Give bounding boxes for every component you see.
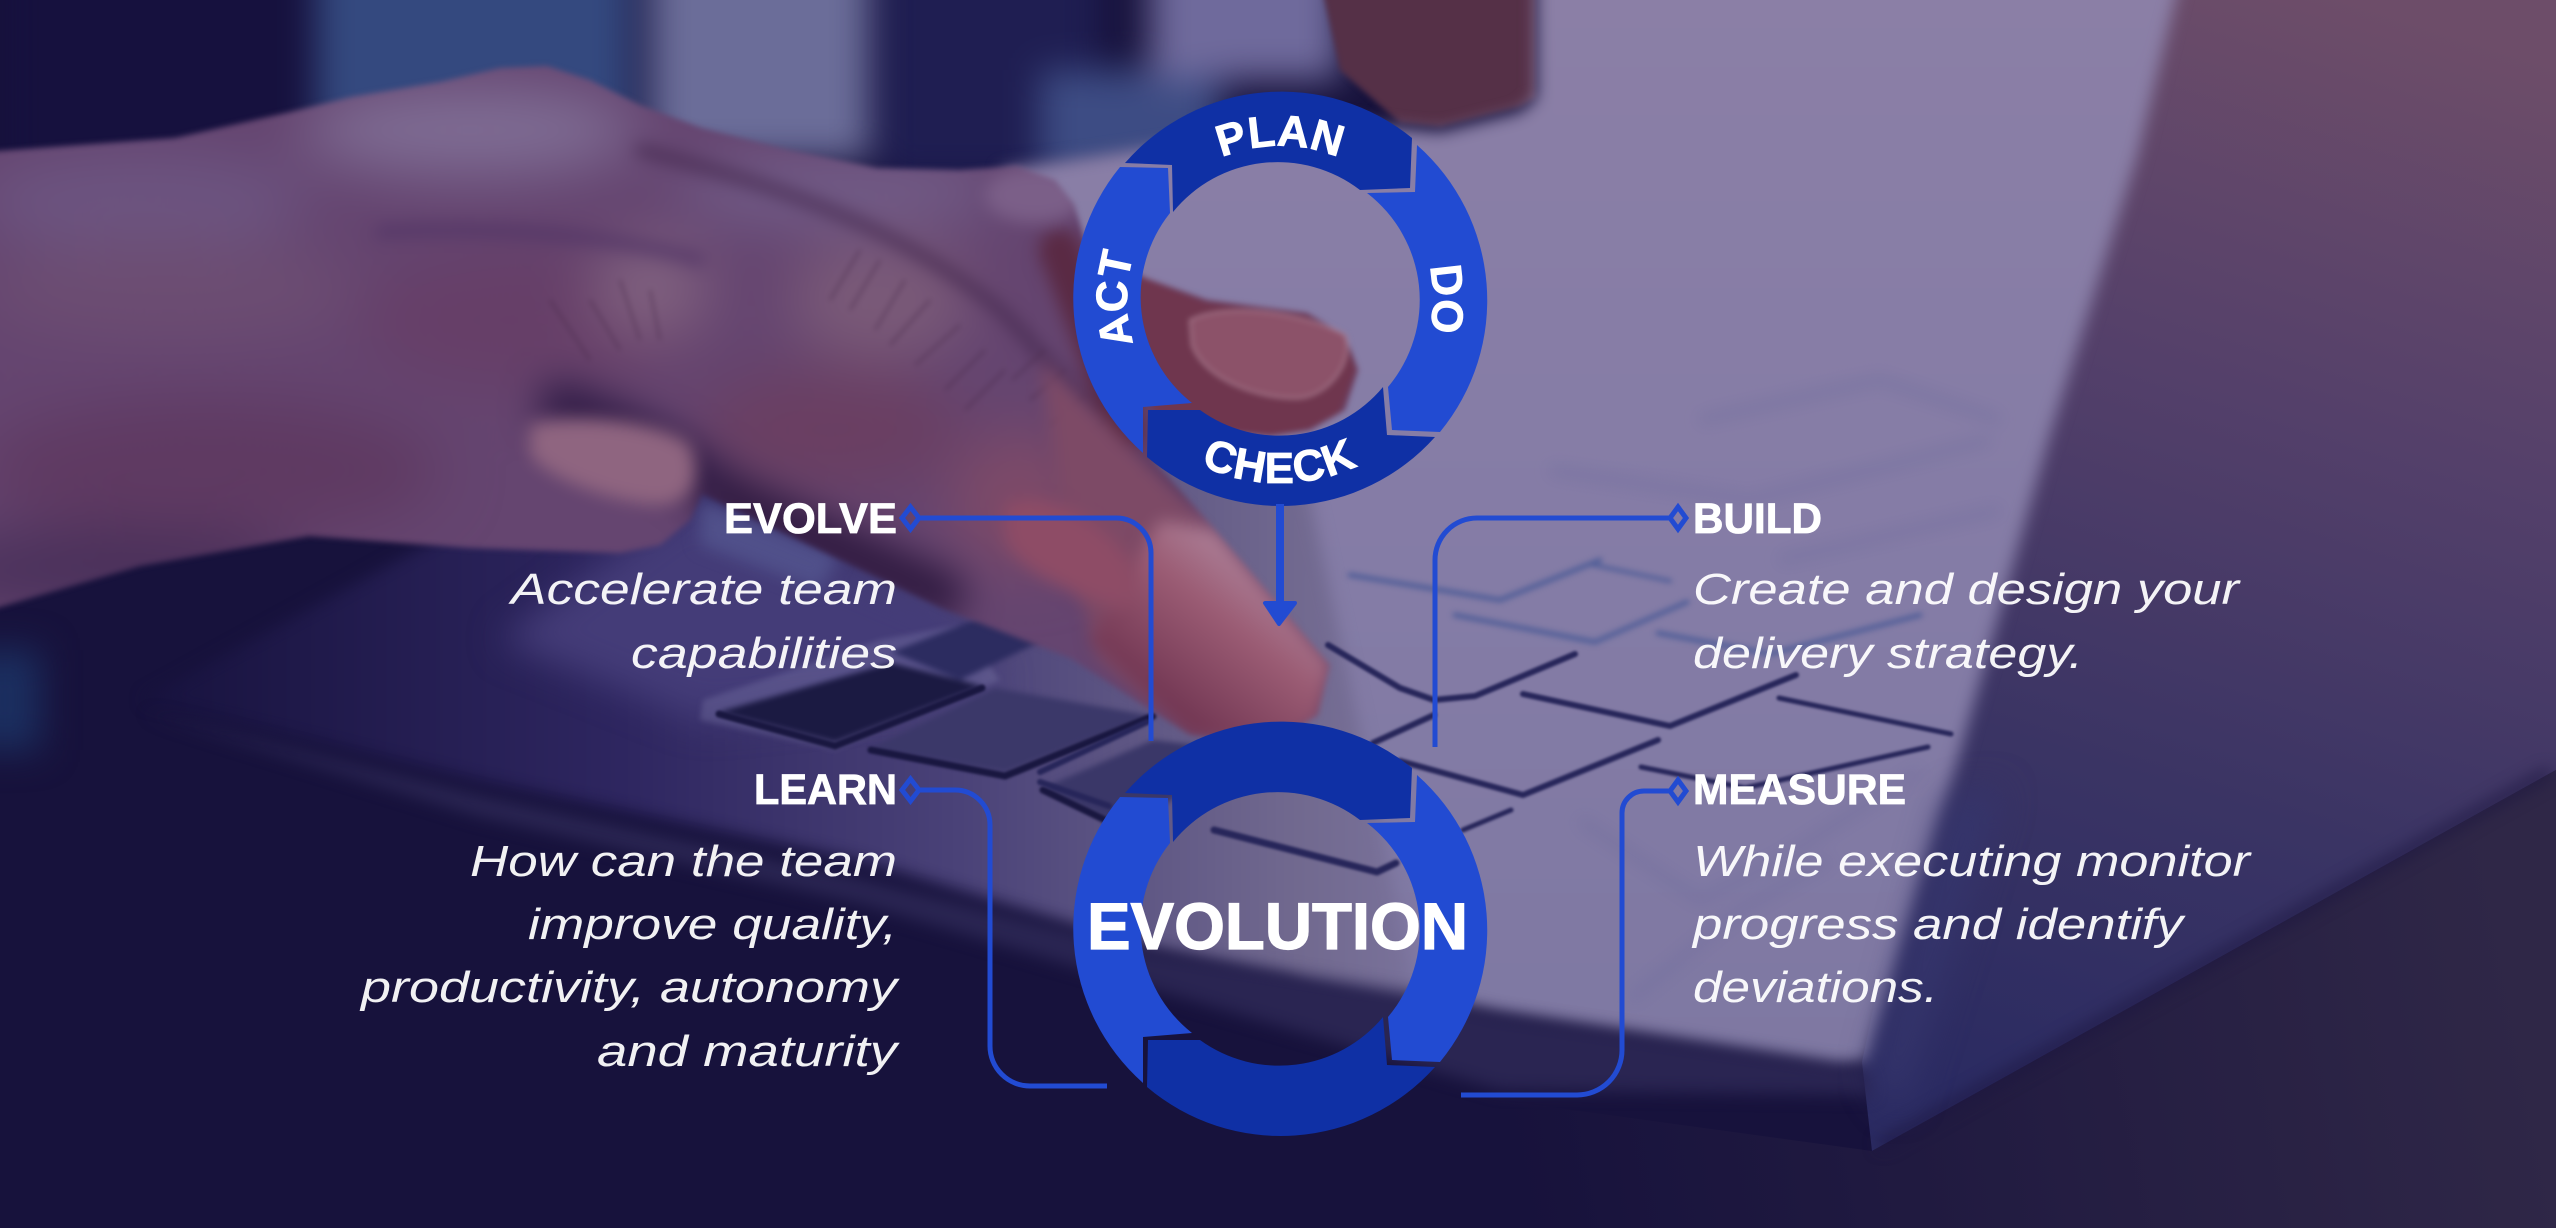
- description: learn: and maturity: [597, 1027, 901, 1076]
- text block: build: [1693, 495, 2242, 678]
- hand: shadows between fingers: [560, 405, 940, 595]
- connector: measure: [1461, 780, 1686, 1095]
- hand: wrinkled finger ridge: [622, 276, 922, 330]
- heading: measure: MEASURE: [1693, 766, 1906, 814]
- heading: evolve: EVOLVE: [724, 495, 897, 543]
- description: learn: [359, 837, 901, 1076]
- background: dark laptop screen: [1862, 0, 2556, 1151]
- background: blurred top backdrop: [0, 0, 1340, 750]
- background: laptop front edge: [143, 712, 1872, 1095]
- description: evolve: Accelerate team: [507, 565, 897, 614]
- connector: learn: [902, 779, 1107, 1086]
- ring: plan do check act: [1073, 92, 1488, 506]
- hand: third nail: [1190, 311, 1347, 398]
- connector: evolve: [902, 507, 1151, 741]
- segment: do: [1367, 145, 1487, 432]
- background: soft keyboard shadows: [1550, 380, 2000, 1000]
- label: check: CHECK: [1206, 438, 1359, 484]
- description: learn: How can the team: [470, 837, 897, 886]
- description: evolve: capabilities: [631, 629, 897, 678]
- hand: finger seen through top ring: [1130, 270, 1358, 440]
- background: pale blue key edges: [1350, 560, 1920, 654]
- background: brown backdrop object: [1320, 0, 1536, 127]
- segment: act: [1073, 167, 1192, 453]
- background: laptop deck: [1000, 0, 2185, 1068]
- text block: evolve: [507, 495, 897, 678]
- description: build: [1693, 565, 2242, 678]
- connector: build: [1435, 507, 1686, 747]
- ring: evolution: [1073, 722, 1487, 1136]
- heading: build: BUILD: [1693, 495, 1822, 543]
- description: measure: [1691, 837, 2253, 1012]
- segment: bottom: [1147, 1017, 1435, 1136]
- hand: rear knuckle tip: [985, 167, 1085, 223]
- background: left keyboard keys: [700, 610, 1240, 830]
- background photo: hand: [0, 64, 1361, 738]
- segment: top: [1125, 722, 1412, 842]
- segment: left: [1073, 797, 1192, 1083]
- arrow: plan cycle to evolution: [1265, 504, 1295, 624]
- description: measure: progress and identify: [1691, 900, 2187, 949]
- description: build: delivery strategy.: [1693, 629, 2083, 678]
- hand: first nail: [530, 419, 696, 506]
- label: act: ACT: [1096, 248, 1134, 344]
- background: lit deck under the finger: [500, 500, 1000, 720]
- text block: measure: [1691, 766, 2253, 1012]
- background: desk surface: [1400, 770, 2556, 1228]
- description: measure: While executing monitor: [1693, 837, 2253, 886]
- description: learn: productivity, autonomy: [359, 963, 901, 1012]
- background: soft screen edge: [1880, 772, 2550, 1146]
- segment: right: [1367, 775, 1487, 1062]
- hand: ring-fingertip shade: [1040, 365, 1209, 693]
- hand: tonal patches: [0, 85, 1090, 610]
- segment: plan: [1125, 92, 1412, 212]
- heading: learn: LEARN: [754, 766, 897, 814]
- description: measure: deviations.: [1693, 963, 1938, 1012]
- text block: learn: [359, 766, 901, 1076]
- title: evolution: EVOLUTION: [1087, 889, 1468, 963]
- description: build: Create and design your: [1693, 565, 2242, 614]
- background: screen hinge highlight: [1875, 790, 2000, 1110]
- label: do: DO: [1430, 265, 1464, 332]
- segment: check: [1147, 387, 1435, 506]
- description: learn: improve quality,: [528, 900, 897, 949]
- description: evolve: [507, 565, 897, 678]
- background: right keyboard key edges: [1040, 645, 1951, 872]
- hand: second nail: [1005, 500, 1134, 606]
- background: left key shadow edges: [719, 688, 1153, 832]
- label: plan: PLAN: [1214, 116, 1345, 156]
